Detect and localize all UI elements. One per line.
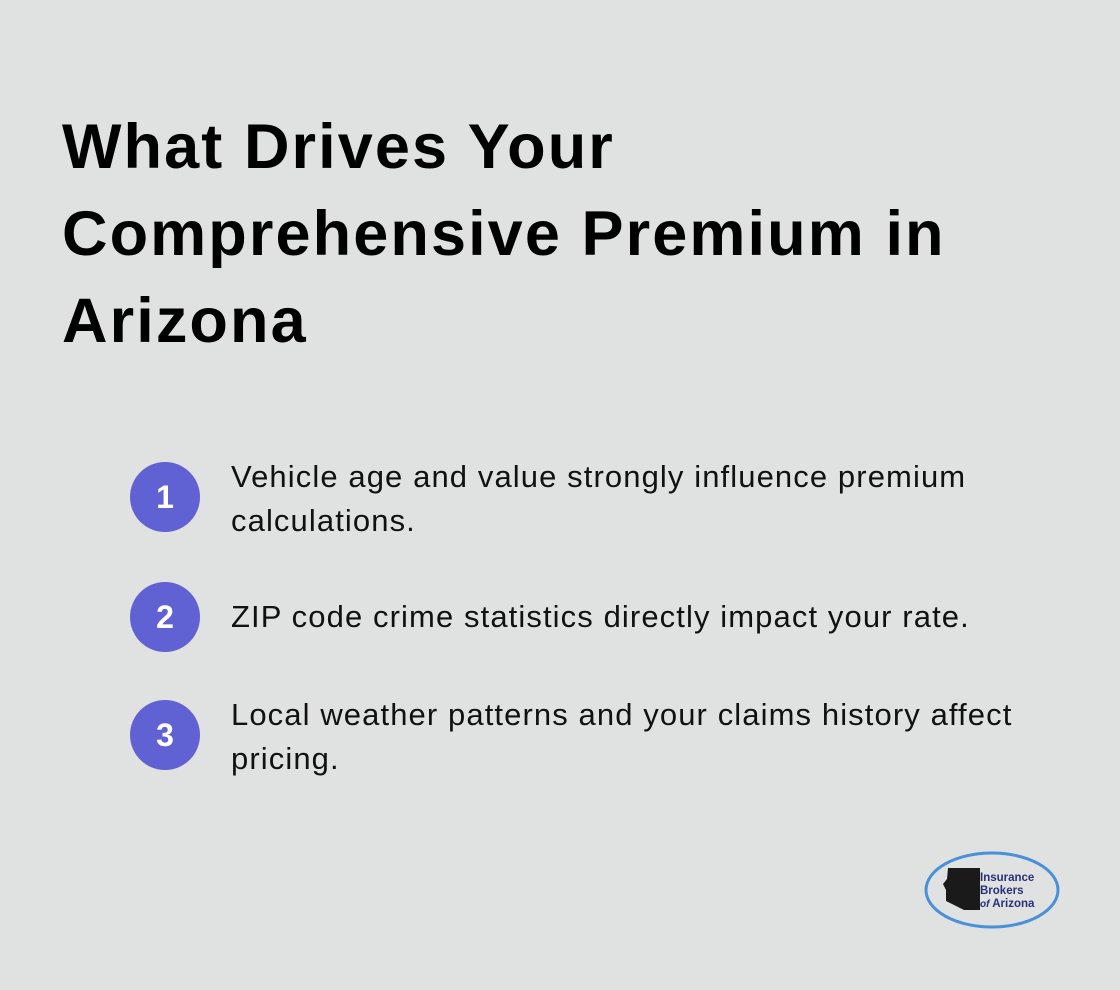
item 1 text: [231, 459, 966, 538]
logo: of Arizona: [980, 898, 1035, 910]
title: Arizona: [62, 286, 308, 356]
item 2: [130, 582, 970, 652]
title: [62, 112, 946, 356]
number circle 1: 1: [156, 479, 174, 515]
item 3 text: Local weather patterns and your claims history affect: [231, 697, 1012, 732]
item 2 text: ZIP code crime statistics directly impact your rate.: [231, 599, 970, 634]
item 3: [130, 697, 1012, 776]
number circle 3: 3: [156, 717, 174, 753]
item 1 text: calculations.: [231, 503, 416, 538]
item 1 text: Vehicle age and value strongly influence premium: [231, 459, 966, 494]
number circle 2: [130, 582, 200, 652]
item 1: [130, 459, 966, 538]
number circle 2: 2: [156, 599, 174, 635]
item 3 text: [231, 697, 1012, 776]
number circle 1: [130, 462, 200, 532]
logo: Insurance: [980, 872, 1034, 884]
title: Comprehensive Premium in: [62, 199, 946, 269]
number circle 3: [130, 700, 200, 770]
logo: Brokers: [980, 885, 1023, 897]
logo: [924, 852, 1060, 928]
item 3 text: pricing.: [231, 741, 340, 776]
title: What Drives Your: [62, 112, 615, 182]
